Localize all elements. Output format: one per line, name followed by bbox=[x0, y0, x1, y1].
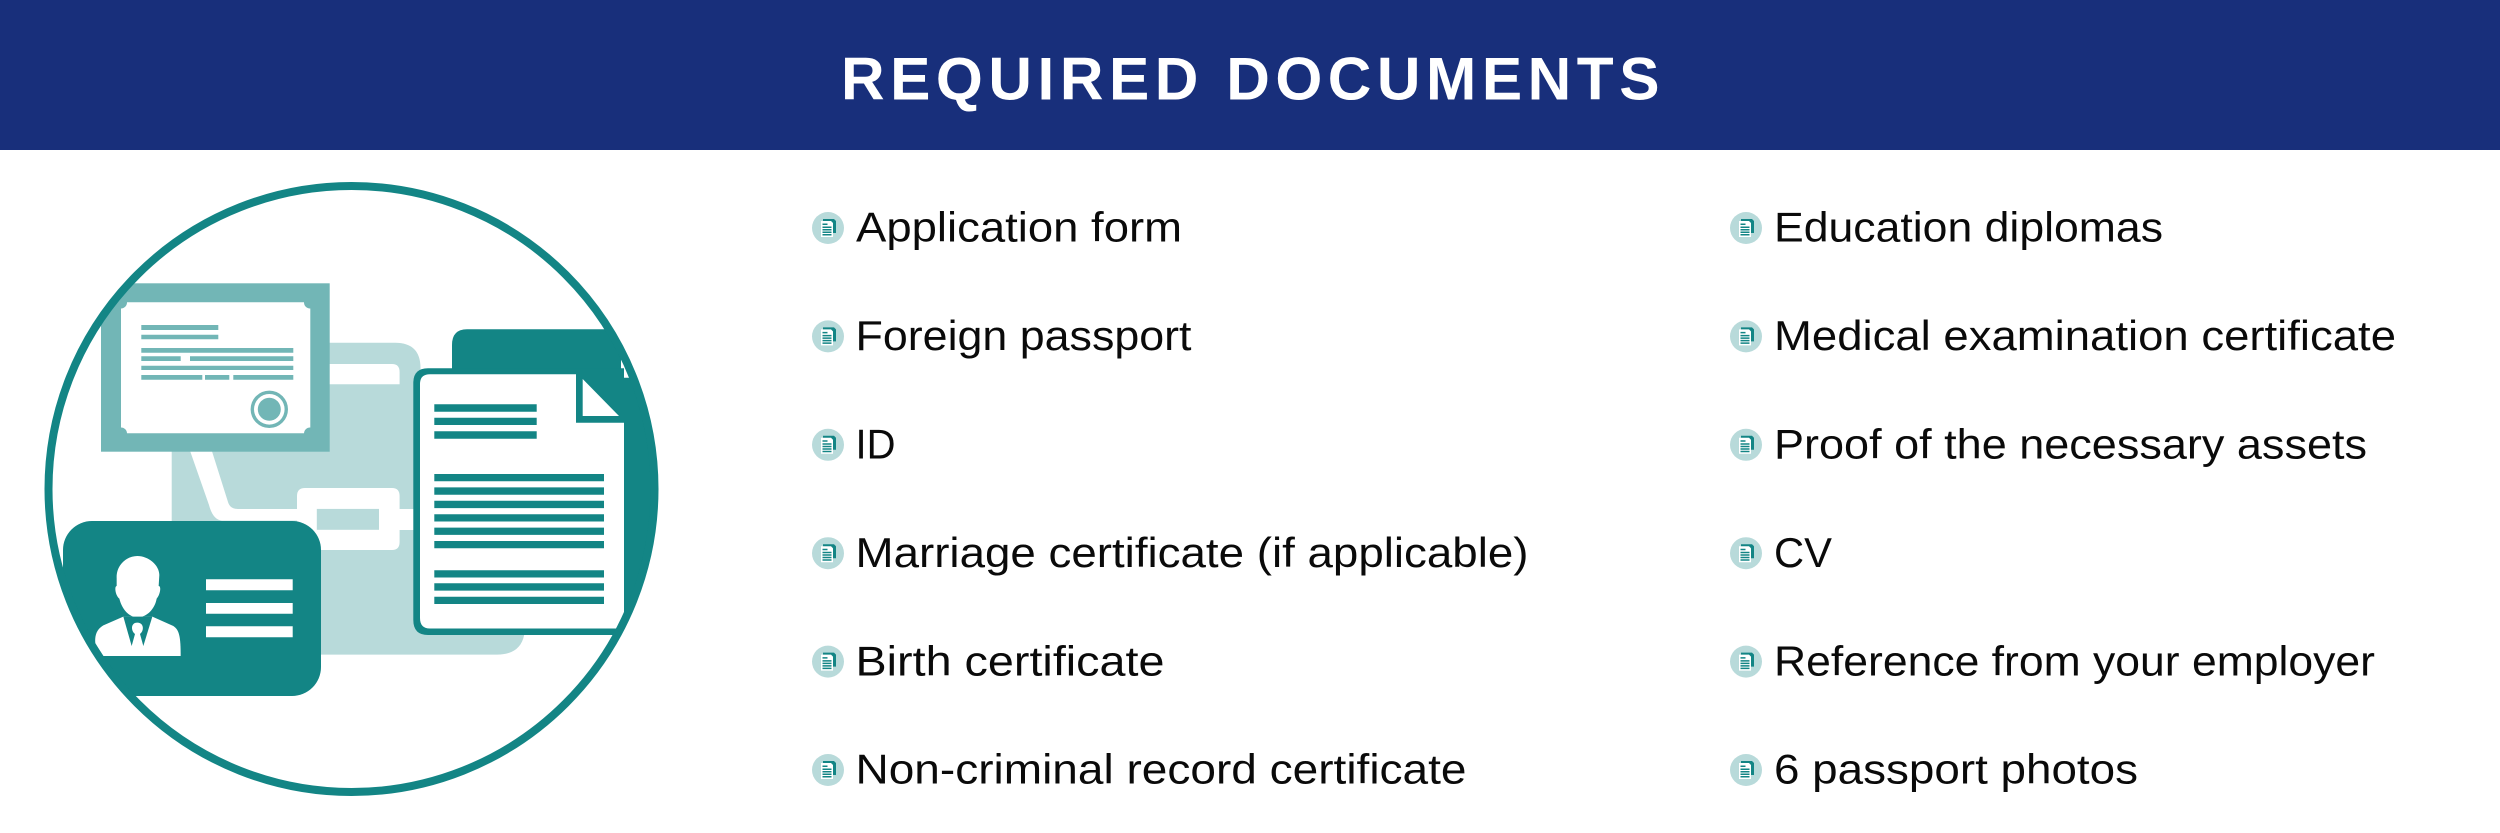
list: left column bbox=[812, 204, 1528, 793]
icon: seal bbox=[251, 391, 288, 428]
item: ID: ID bbox=[856, 420, 896, 468]
illustration: documents in circle bbox=[48, 186, 700, 792]
item: Birth certificate: Birth certificate bbox=[856, 637, 1164, 684]
item: Foreign passport: Foreign passport bbox=[856, 312, 1192, 359]
item: Medical examination certificate: Medical examination certificate bbox=[1774, 312, 2396, 359]
circle outline bbox=[48, 186, 654, 792]
header banner bbox=[0, 0, 2500, 150]
title: REQUIRED DOCUMENTS bbox=[841, 46, 1665, 112]
item: Application form: Application form bbox=[856, 204, 1182, 251]
list: right column bbox=[1730, 204, 2396, 793]
icon: ID card bbox=[63, 521, 321, 696]
item: CV: CV bbox=[1774, 529, 1832, 576]
item: Non-criminal record certificate: Non-criminal record certificate bbox=[856, 746, 1466, 793]
item: Marriage certificate: Marriage certificate (if applicable) bbox=[856, 529, 1528, 576]
item: CV bbox=[1730, 529, 1832, 576]
icon: person silhouette bbox=[95, 556, 181, 656]
item: Education diplomas: Education diplomas bbox=[1774, 204, 2163, 251]
icon: text document bbox=[413, 329, 650, 635]
item: 6 passport photos: 6 passport photos bbox=[1774, 746, 2138, 793]
icon: certificate bbox=[101, 283, 330, 452]
item: Reference from your employer: Reference from your employer bbox=[1774, 637, 2375, 684]
item: ID bbox=[812, 420, 896, 468]
item: Proof of the necessary assets: Proof of the necessary assets bbox=[1774, 420, 2367, 468]
icon: briefcase bbox=[172, 343, 525, 655]
card text lines bbox=[206, 579, 293, 637]
